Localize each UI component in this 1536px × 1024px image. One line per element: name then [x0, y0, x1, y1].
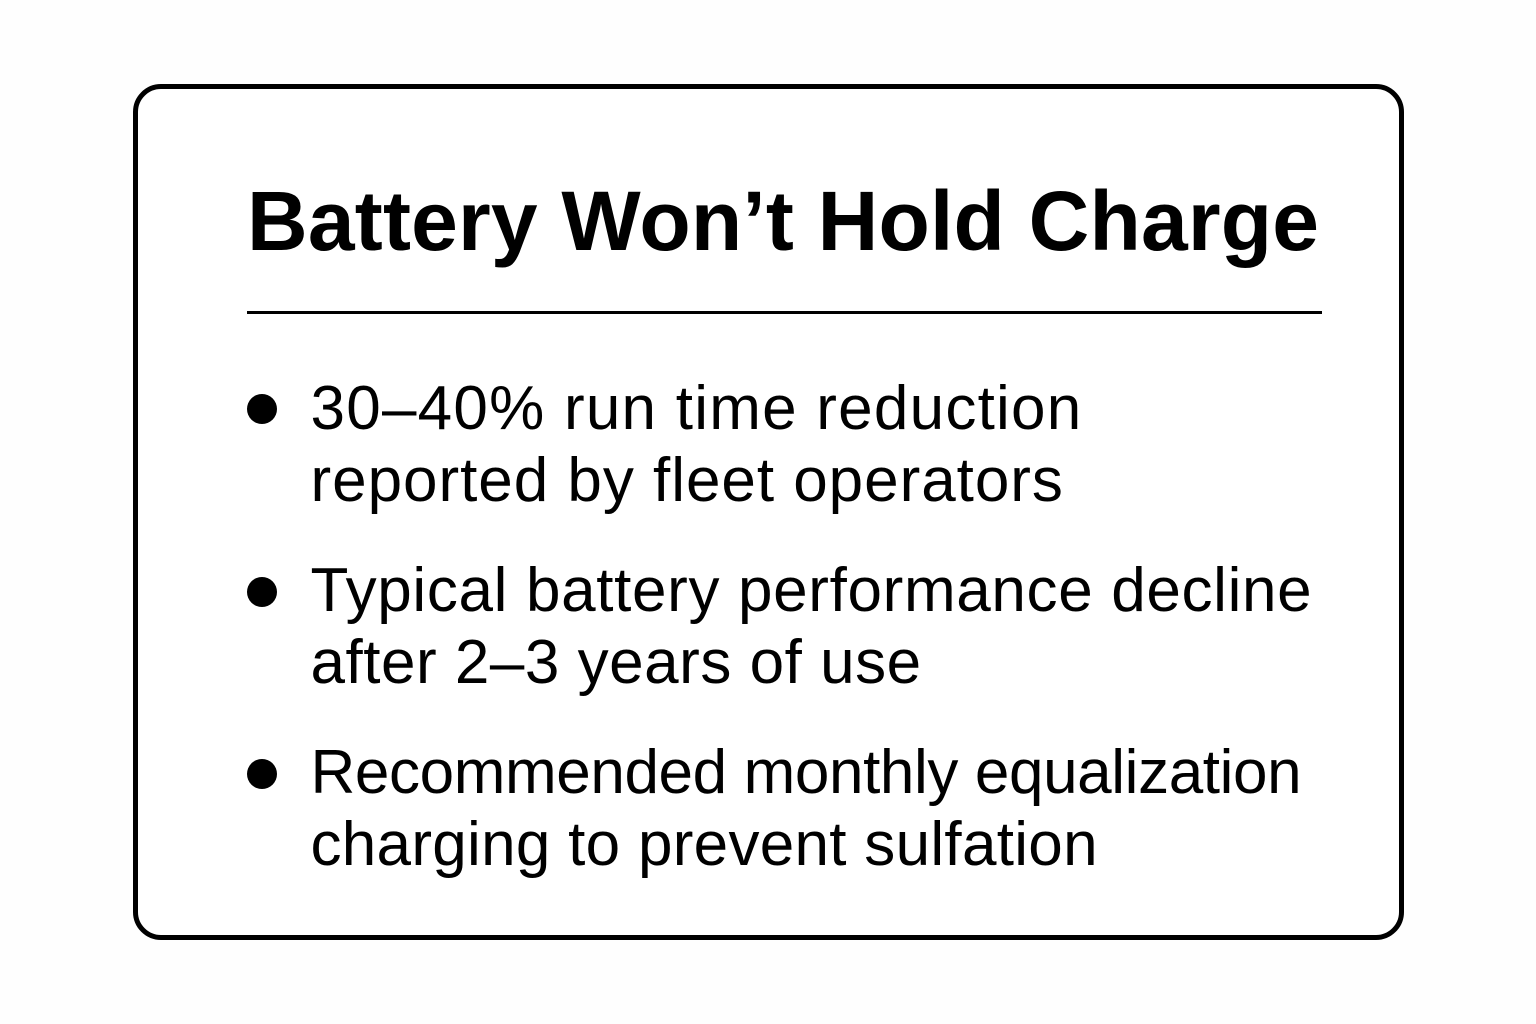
bullet dot 1	[247, 394, 277, 424]
bullet text 2	[310, 556, 1312, 696]
bullet text 3: charging to prevent sulfation	[310, 810, 1098, 878]
bullet text 3: Recommended monthly equalization	[310, 738, 1301, 806]
bullet item 1	[247, 374, 1083, 514]
bullet text 1: 30–40% run time reduction	[310, 374, 1083, 442]
bullet dot 2	[247, 577, 277, 607]
bullet item 3	[247, 738, 1301, 878]
bullet item 2	[247, 556, 1312, 696]
bullet dot 3	[247, 759, 277, 789]
bullet text 1: reported by fleet operators	[310, 446, 1064, 514]
divider rule	[247, 311, 1322, 314]
bullet text 2: Typical battery performance decline	[310, 556, 1312, 624]
title: Battery Won’t Hold Charge	[247, 174, 1319, 268]
bullet text 2: after 2–3 years of use	[310, 628, 922, 696]
bullet text 1	[310, 374, 1083, 514]
bullet text 3	[310, 738, 1301, 878]
panel: card	[133, 84, 1404, 940]
